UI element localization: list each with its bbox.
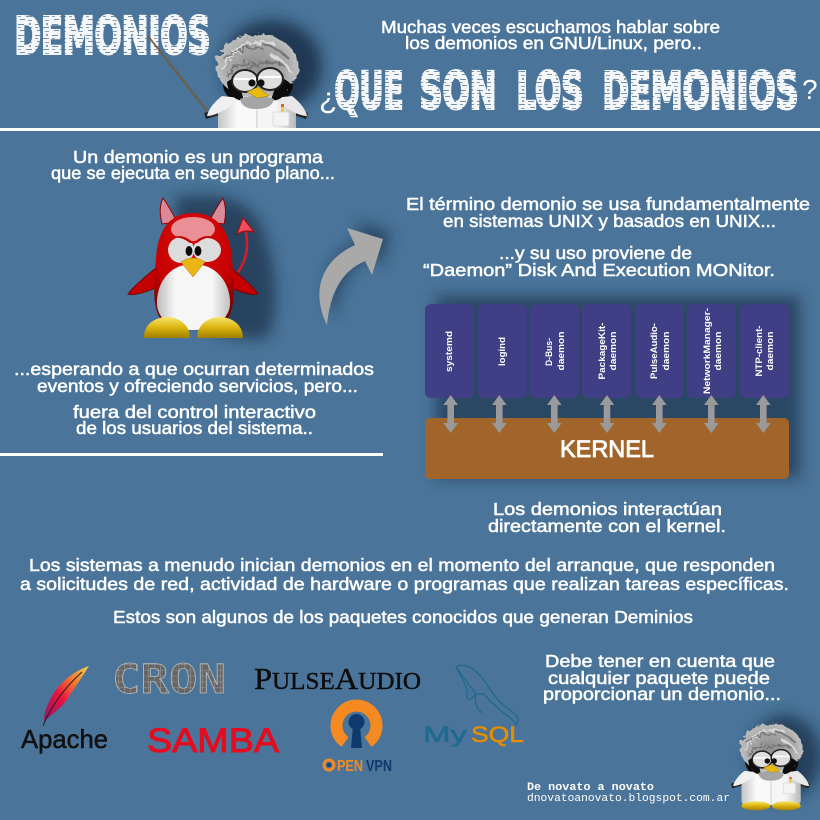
- text: definition: Un demonio es un programa: [73, 147, 323, 167]
- daemon labels: systemd: [444, 331, 455, 372]
- text: unix origin: en sistemas UNIX y basados en UNIX...: [443, 211, 776, 231]
- header intro text: [381, 17, 720, 53]
- text: unix origin: [406, 194, 810, 280]
- text: waiting for events: eventos y ofreciendo servicios, pero...: [37, 376, 358, 396]
- kernel bar: KERNEL: [560, 436, 654, 463]
- logo: PulseAudio: PULSEAUDIO: [254, 661, 421, 696]
- logo: OpenVPN: [324, 706, 392, 775]
- text: waiting for events: fuera del control interactivo: [73, 402, 316, 422]
- text: waiting for events: [14, 359, 374, 438]
- daemon labels: PackageKit-: [597, 322, 608, 380]
- daemon labels: daemon: [713, 331, 724, 370]
- logo: MySQL: My: [423, 722, 467, 747]
- daemon labels: logind: [497, 337, 508, 366]
- text: kernel interaction: [488, 499, 726, 536]
- logo: Cron: CRON: [112, 657, 226, 703]
- header intro text: los demonios en GNU/Linux, pero..: [405, 33, 702, 53]
- logo: MySQL: [423, 665, 524, 747]
- daemon labels: NetworkManager-: [702, 308, 713, 394]
- daemon labels: [444, 308, 776, 394]
- heading: question: LOS: [516, 62, 584, 122]
- text: waiting for events: de los usuarios del sistema..: [76, 418, 313, 438]
- daemon labels: D-Bus-: [544, 338, 555, 366]
- text: kernel interaction: Los demonios interactúan: [493, 499, 722, 519]
- text: packages: Estos son algunos de los paquetes conocidos que generan Deminios: [113, 607, 693, 627]
- text: waiting for events: ...esperando a que ocurran determinados: [14, 359, 374, 379]
- text: note: proporcionar un demonio...: [543, 684, 781, 704]
- arrow: curved grey: [319, 221, 391, 325]
- credits: dnovatoanovato.blogspot.com.ar: [527, 793, 730, 805]
- logo: MySQL: SQL: [471, 722, 524, 747]
- text: definition: que se ejecuta en segundo plano...: [51, 163, 335, 183]
- logo: Apache: [21, 666, 108, 754]
- heading: question: SON: [420, 62, 496, 122]
- logo: OpenVPN: PEN: [337, 758, 363, 775]
- daemon labels: PulseAudio-: [649, 323, 660, 379]
- text: unix origin: “Daemon” Disk And Execution MONitor.: [423, 260, 775, 280]
- double arrows: [443, 395, 771, 433]
- illustration: small professor penguin: [731, 715, 820, 810]
- heading: question: ?: [802, 74, 818, 105]
- text: unix origin: ...y su uso proviene de: [499, 243, 692, 263]
- daemon labels: daemon: [608, 331, 619, 370]
- heading: question: ¿: [319, 82, 337, 115]
- daemon labels: NTP-client-: [754, 326, 765, 376]
- text: boot: Los sistemas a menudo inician demonios en el momento del arranque, que responden: [29, 555, 775, 575]
- credits: De novato a novato: [527, 782, 654, 794]
- daemon labels: daemon: [661, 331, 672, 370]
- logo: Apache: Apache: [21, 724, 108, 754]
- text: kernel interaction: directamente con el kernel.: [488, 516, 726, 536]
- text: definition: [51, 147, 335, 183]
- logo: OpenVPN: VPN: [366, 758, 392, 775]
- illustration: red devil penguin: [128, 195, 276, 339]
- daemon labels: daemon: [765, 331, 776, 370]
- illustration: professor penguin with pointer: [148, 20, 322, 148]
- daemon boxes: [425, 304, 789, 398]
- header intro text: Muchas veces escuchamos hablar sobre: [381, 17, 720, 37]
- text: note: Debe tener en cuenta que: [545, 651, 775, 671]
- heading: question: [319, 62, 818, 122]
- credits: [527, 782, 730, 805]
- text: boot: [20, 555, 789, 594]
- text: unix origin: El término demonio se usa fundamentalmente: [406, 194, 810, 214]
- text: note: [543, 651, 781, 704]
- text: boot: a solicitudes de red, actividad de hardware o programas que realizan tareas específicas.: [20, 574, 789, 594]
- heading: question: QUE: [334, 62, 404, 122]
- title: Demonios: DEMONIOS: [14, 8, 210, 66]
- kernel bar: [425, 418, 789, 479]
- daemon labels: daemon: [556, 331, 567, 370]
- diagram: daemons and kernel: [425, 296, 800, 479]
- logo: Samba: SAMBA: [147, 722, 279, 760]
- text: note: cualquier paquete puede: [548, 668, 770, 688]
